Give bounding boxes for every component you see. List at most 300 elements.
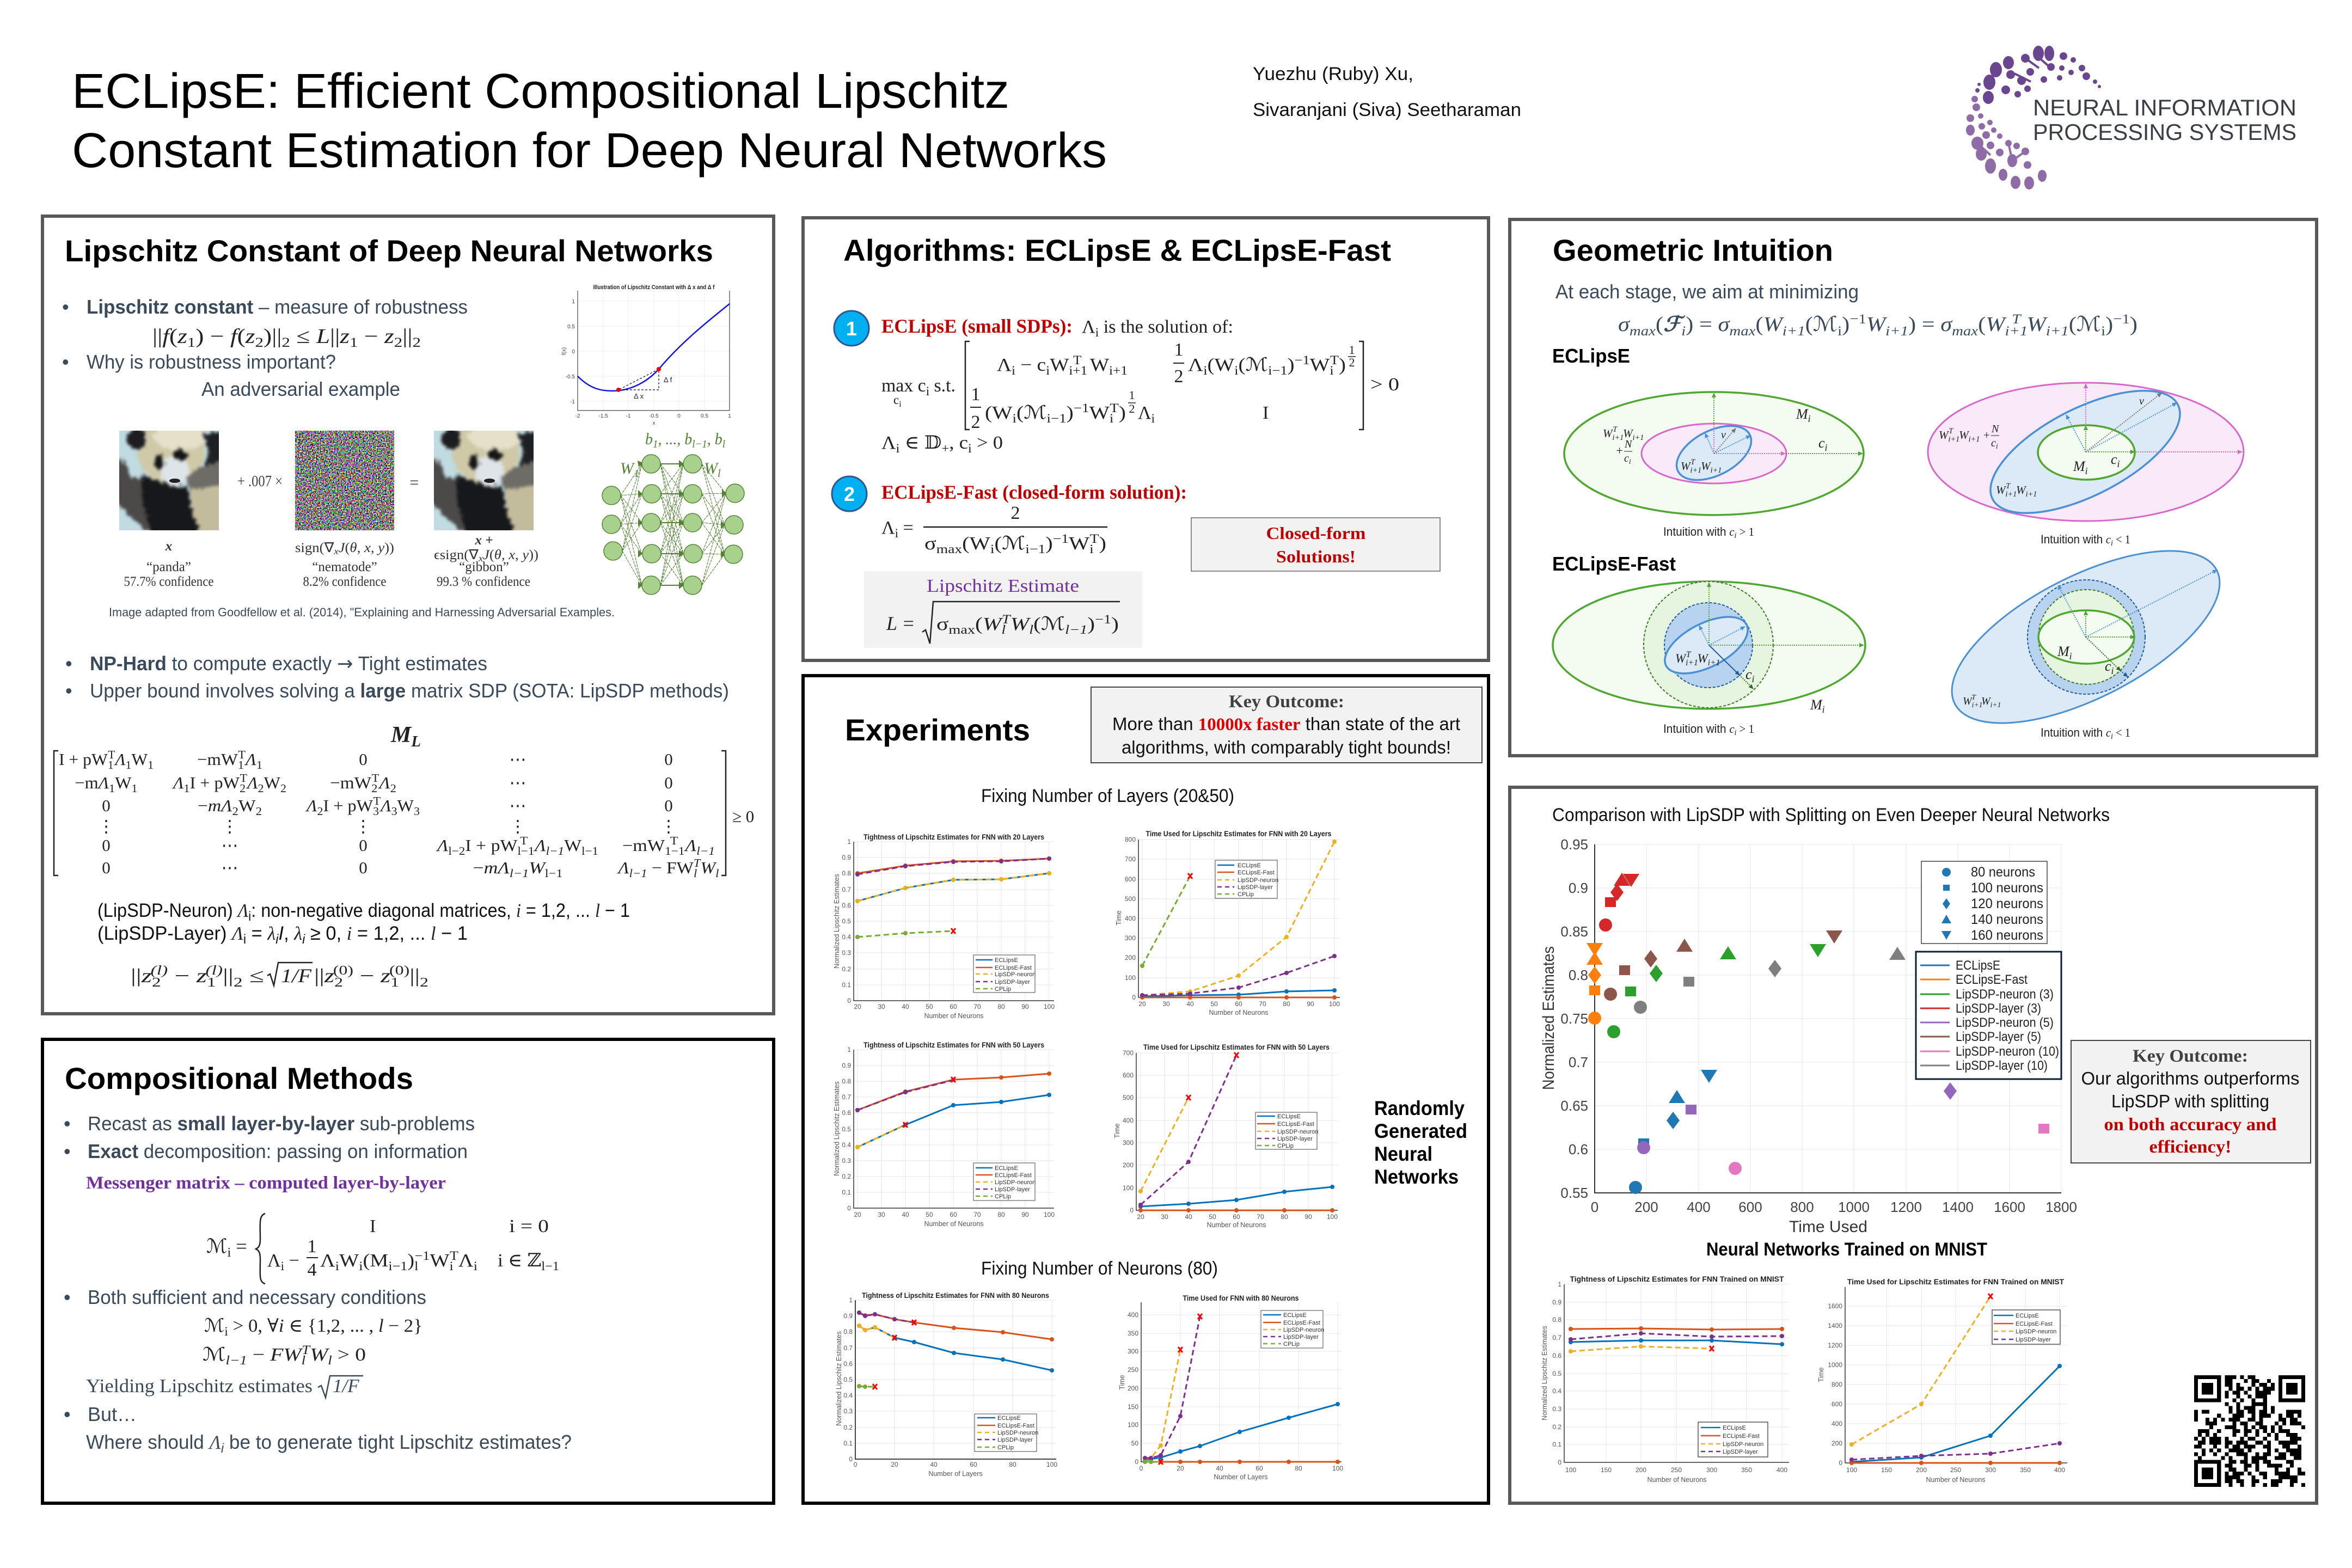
formula: closed-form	[881, 503, 1107, 556]
panel: compositional methods	[42, 1039, 774, 1503]
chart: tightness 20 layers: Number of Neurons	[924, 1012, 984, 1020]
formula: bound: −	[168, 965, 197, 987]
chart: time 50 layers: Number of Neurons	[1206, 1221, 1266, 1229]
chart: illustration of Lipschitz constant: 0.5	[701, 413, 708, 419]
chart: time 80 neurons: Time	[1118, 1375, 1126, 1390]
formula: small SDP: i+1	[1109, 364, 1128, 378]
formula: M_L matrix: −mW	[330, 773, 369, 792]
chart: illustration of Lipschitz constant: Illustration of Lipschitz Constant with Δ x and Δ f	[593, 284, 715, 291]
formula: closed-form: )	[1099, 534, 1106, 554]
chart: scatter comparison: Normalized Estimates	[1540, 946, 1558, 1090]
chart: time MNIST: 1000	[1828, 1361, 1842, 1369]
chart: time 20 layers	[1115, 829, 1340, 1016]
chart: time 80 neurons: 0	[1140, 1465, 1143, 1472]
formula: M_L matrix: T	[372, 771, 379, 785]
formula: M_L matrix: l−1	[510, 867, 529, 880]
subheading: ECLipsE-Fast: ECLipsE-Fast	[1552, 553, 1676, 575]
formula: sigma max: )	[1842, 313, 1849, 336]
diagram: ECLipsE-Fast c_i less than 1: c	[2105, 658, 2111, 674]
formula: bound: 2	[234, 975, 243, 990]
chart: time 50 layers: 50	[1209, 1213, 1216, 1221]
formula: bound: 1/F	[281, 965, 312, 987]
text: ECLipsE heading: ECLipsE (small SDPs):	[881, 315, 1073, 337]
callout: Lipschitz estimate: l−1	[1065, 623, 1087, 637]
bullet: why robustness	[62, 351, 400, 400]
formula: sigma max: W	[1763, 313, 1785, 336]
callout: closed-form solutions: Closed-form	[1266, 523, 1366, 543]
formula: M_L matrix: I + pW	[189, 773, 240, 792]
formula: M_L matrix: Λ	[533, 836, 546, 855]
text: LipSDP variants: i	[275, 932, 279, 947]
formula: conditions: −	[247, 1345, 270, 1365]
formula: M_L matrix: −mΛ	[75, 773, 108, 792]
formula: conditions: l−1	[226, 1353, 247, 1368]
formula: Lipschitz definition: )||	[264, 325, 281, 348]
formula: Lipschitz definition: z	[384, 325, 394, 348]
formula: messenger recursion: i−1	[388, 1259, 407, 1273]
heading: Experiments	[845, 713, 1030, 747]
formula: closed-form: T	[1090, 532, 1099, 546]
diagram: ECLipsE c_i greater than 1: T	[1690, 458, 1695, 467]
diagram: ECLipsE-Fast c_i less than 1: W	[1981, 695, 1992, 707]
legend: methods	[1916, 952, 2061, 1079]
formula: closed-form: (W	[962, 534, 991, 554]
formula: sigma max: (ℳ	[1805, 313, 1837, 336]
chart: tightness MNIST: Normalized Lipschitz Estimates	[1541, 1326, 1548, 1420]
chart: time 50 layers: 80	[1281, 1213, 1288, 1221]
formula: Lipschitz definition: ≤	[290, 325, 316, 348]
formula: small SDP: s.t.	[929, 376, 955, 396]
formula: sigma max: ) =	[1908, 313, 1940, 336]
diagram: ECLipsE c_i less than 1: i+1	[1948, 435, 1959, 444]
chart: tightness MNIST: Tightness of Lipschitz Estimates for FNN Trained on MNIST	[1570, 1275, 1784, 1283]
diagram: neural network	[602, 430, 744, 595]
callout: key outcome: Key Outcome:	[1229, 692, 1344, 712]
chart: tightness 50 layers: 60	[950, 1211, 957, 1218]
image: adversarial noise	[295, 431, 394, 530]
formula: M_L matrix: 1	[183, 782, 189, 795]
chart: time 80 neurons	[1118, 1294, 1343, 1481]
diagram: ECLipsE-Fast c_i greater than 1: i+1	[1708, 658, 1720, 667]
formula: M_L matrix: 0	[359, 750, 367, 769]
callout: Lipschitz estimate: l	[1029, 623, 1033, 637]
diagram: ECLipsE c_i less than 1: v	[2139, 395, 2144, 407]
chart: time 50 layers: 400	[1123, 1117, 1134, 1124]
caption: panda: “panda”	[146, 560, 191, 574]
formula: M_L matrix: M	[391, 722, 411, 748]
chart: time 20 layers: 800	[1125, 836, 1136, 843]
chart: tightness MNIST: LipSDP-layer	[1723, 1449, 1758, 1455]
formula: sigma max: max	[1952, 323, 1979, 339]
chart: illustration of Lipschitz constant: 0	[677, 413, 681, 419]
formula: small SDP: > 0	[1370, 375, 1399, 395]
callout: Lipschitz estimate: (	[975, 614, 983, 634]
chart: tightness 20 layers: LipSDP-layer	[995, 979, 1030, 985]
diagram: ECLipsE c_i less than 1: W	[1959, 428, 1970, 442]
subheading: ECLipsE: ECLipsE	[1552, 345, 1630, 367]
formula: small SDP: )	[1119, 403, 1126, 423]
formula: sigma max: i	[1681, 323, 1686, 339]
formula: M_L matrix: 2	[390, 782, 396, 795]
formula: small SDP: > 0	[972, 433, 1003, 453]
formula: messenger recursion: ℳ	[206, 1235, 228, 1257]
formula: M_L matrix: W	[700, 858, 718, 877]
callout: key outcome comparison	[2071, 1040, 2311, 1163]
diagram: ECLipsE-Fast c_i greater than 1: Intuition with c	[1663, 722, 1735, 736]
formula: bound: −	[353, 965, 381, 987]
text: LipSDP variants: (LipSDP-Layer) Λ	[97, 923, 243, 944]
text: image credit: Image adapted from Goodfellow et al. (2014), "Explaining and Harnessing Adversarial Examples.	[109, 605, 615, 619]
chart: tightness 20 layers: 0.4	[842, 933, 851, 941]
formula: small SDP: 1	[1174, 340, 1184, 360]
chart: time 50 layers: 600	[1123, 1071, 1134, 1079]
chart: tightness 50 layers: 70	[973, 1211, 981, 1218]
formula: M_L matrix: 2	[256, 805, 262, 818]
chart: illustration of Lipschitz constant: 0.5	[567, 324, 575, 330]
diagram: ECLipsE c_i greater than 1: v	[1721, 429, 1726, 441]
formula: small SDP: W	[1050, 355, 1069, 375]
chart: tightness 50 layers: 0.4	[842, 1141, 851, 1149]
formula: small SDP: T	[1110, 401, 1119, 415]
formula: sigma max: −1	[1849, 311, 1866, 327]
formula: M_L matrix: 2	[258, 782, 264, 795]
chart: tightness 20 layers: 80	[997, 1003, 1005, 1010]
chart: time MNIST: 400	[1832, 1420, 1842, 1428]
chart: time 20 layers: 100	[1125, 974, 1136, 982]
formula: bound: 2	[152, 975, 161, 990]
formula: sigma max: max	[1630, 323, 1656, 339]
chart: time 20 layers: 500	[1125, 895, 1136, 903]
callout: key outcome comparison: Key Outcome:	[2133, 1046, 2248, 1066]
callout: key outcome comparison: efficiency!	[2149, 1137, 2231, 1157]
chart: time 50 layers: ECLipsE-Fast	[1277, 1121, 1314, 1128]
formula: messenger recursion: 1	[307, 1236, 317, 1257]
chart: tightness MNIST: 0	[1558, 1459, 1561, 1466]
text: ECLipsE heading	[881, 315, 1233, 340]
formula: closed-form: Λ	[881, 518, 895, 538]
formula: M_L matrix: T	[373, 794, 381, 807]
diagram: ECLipsE c_i less than 1: T	[1949, 427, 1953, 436]
formula: Lipschitz definition: 1	[187, 334, 195, 350]
formula: conditions: T	[302, 1343, 311, 1357]
callout: Lipschitz estimate: )	[1087, 614, 1095, 634]
panel: experiments	[803, 676, 1489, 1503]
chart: scatter comparison: 1200	[1890, 1199, 1922, 1215]
chart: tightness 80 neurons: ECLipsE	[997, 1415, 1021, 1422]
formula: small SDP: 1	[1129, 388, 1135, 402]
title: ECLipsE: Efficient Compositional Lipschitz	[72, 64, 1009, 119]
formula: small SDP: W	[1310, 355, 1330, 375]
text: LipSDP variants: i	[243, 932, 246, 947]
chart: tightness 20 layers: 100	[1044, 1003, 1055, 1010]
chart: tightness MNIST: ECLipsE-Fast	[1723, 1433, 1760, 1440]
image: panda adversarial	[426, 416, 542, 538]
chart: tightness 50 layers: Number of Neurons	[924, 1220, 984, 1228]
formula: messenger recursion: 4	[307, 1260, 317, 1280]
formula: M_L matrix: Λ	[377, 773, 390, 792]
formula: closed-form: σ	[924, 534, 934, 554]
chart: scatter comparison: 800	[1790, 1199, 1814, 1215]
formula: M_L matrix: 0	[359, 836, 367, 855]
chart: tightness MNIST: 300	[1706, 1466, 1717, 1474]
formula: Lipschitz definition: L||z	[316, 325, 348, 348]
chart: scatter comparison: 0.75	[1560, 1010, 1588, 1027]
chart: tightness 50 layers: 0.7	[842, 1093, 851, 1101]
chart: tightness MNIST: 1	[1558, 1281, 1561, 1288]
chart: tightness MNIST: 400	[1777, 1466, 1787, 1474]
formula: M_L matrix: W	[264, 773, 281, 792]
formula: conditions: ℳ	[204, 1316, 224, 1336]
chart: time MNIST: Number of Neurons	[1926, 1476, 1986, 1484]
diagram: ECLipsE c_i greater than 1: W	[1701, 460, 1712, 473]
formula: small SDP: T	[1330, 353, 1339, 367]
bullet: why robustness: •	[62, 351, 69, 373]
chart: time 50 layers: 700	[1123, 1049, 1134, 1057]
chart: tightness 80 neurons: 40	[930, 1461, 938, 1468]
formula: sigma max: (	[1755, 313, 1763, 336]
diagram: ECLipsE c_i greater than 1: > 1	[1736, 525, 1754, 538]
chart: time 20 layers: 700	[1125, 855, 1136, 863]
formula: bound: (l)	[205, 963, 223, 978]
text: question: be to generate tight Lipschitz estimates?	[224, 1431, 572, 1453]
bullet: but: •	[64, 1403, 71, 1425]
diagram: ECLipsE-Fast c_i less than 1: M	[2057, 644, 2069, 659]
chart: time 50 layers: LipSDP-neuron	[1277, 1129, 1318, 1135]
chart: tightness 50 layers: 100	[1044, 1211, 1055, 1218]
chart: time MNIST	[1817, 1277, 2067, 1484]
chart: tightness 80 neurons: 20	[891, 1461, 898, 1468]
chart: time 50 layers: Time	[1113, 1123, 1121, 1138]
bullet: Lipschitz constant: Lipschitz constant – measure of robustness	[87, 296, 468, 318]
formula: conditions: i	[224, 1325, 228, 1339]
formula: small SDP: 2	[1129, 402, 1135, 415]
callout: Lipschitz estimate: σ	[936, 614, 946, 634]
formula: M_L matrix: Λ	[171, 773, 184, 792]
badge 2	[832, 476, 867, 511]
panel: geometric intuition	[1510, 219, 2317, 758]
chart: time 80 neurons: 40	[1216, 1465, 1223, 1472]
chart: time 80 neurons: 400	[1128, 1311, 1138, 1319]
diagram: ECLipsE-Fast c_i greater than 1: i+1	[1686, 658, 1698, 667]
formula: small SDP: i+1	[1069, 364, 1087, 378]
diagram: ECLipsE c_i less than 1: c	[1991, 437, 1996, 449]
formula: small SDP: 1	[971, 384, 980, 405]
chart: tightness MNIST: 150	[1601, 1466, 1612, 1474]
formula: Lipschitz definition: 1	[350, 334, 358, 350]
formula: small SDP: −1	[1074, 401, 1089, 415]
chart: time 20 layers: 20	[1138, 1000, 1146, 1008]
callout: key outcome: More than 10000x faster than state of the art	[1112, 714, 1460, 734]
formula: Lipschitz definition: 2	[255, 334, 264, 350]
diagram: ECLipsE c_i less than 1: +	[1980, 428, 1990, 442]
chart: time MNIST: 800	[1832, 1381, 1842, 1388]
text: randomly generated neural networks	[1374, 1097, 1467, 1188]
text: LipSDP variants	[97, 900, 630, 947]
formula: sigma max: i+1	[2046, 323, 2069, 339]
chart: tightness 20 layers: 60	[950, 1003, 957, 1010]
formula: M_L matrix: l−1	[545, 867, 563, 880]
caption: gibbon: “gibbon”	[459, 560, 509, 574]
panel: Lipschitz constant of deep neural networks	[42, 216, 774, 1014]
diagram: ECLipsE-Fast c_i less than 1: i	[2111, 665, 2114, 676]
formula: sigma max: −1	[2113, 311, 2130, 327]
panel: comparison and MNIST	[1510, 787, 2317, 1503]
chart: scatter comparison: 0.8	[1569, 967, 1588, 983]
formula: messenger recursion: i	[450, 1259, 454, 1273]
formula: small SDP: I	[1263, 403, 1269, 423]
callout: key outcome	[1091, 687, 1482, 763]
text: LipSDP variants: (LipSDP-Neuron) Λ	[97, 900, 249, 921]
chart: time 20 layers: 80	[1283, 1000, 1290, 1008]
formula: M_L matrix: W	[131, 750, 148, 769]
formula: M_L matrix: Λ	[246, 773, 258, 792]
formula: small SDP: +	[941, 442, 949, 456]
callout: key outcome comparison: Our algorithms outperforms	[2081, 1068, 2300, 1088]
diagram: neural network: l	[722, 438, 725, 450]
formula: M_L matrix: 0	[359, 858, 367, 877]
chart: time 20 layers: 200	[1125, 954, 1136, 961]
chart: tightness 80 neurons: Number of Layers	[928, 1470, 983, 1478]
bullet: sufficient and necessary: Both sufficient and necessary conditions	[88, 1286, 426, 1308]
chart: illustration of Lipschitz constant: x	[652, 420, 656, 426]
chart: tightness 50 layers: 80	[997, 1211, 1005, 1218]
formula: M_L matrix: ⋮	[510, 817, 526, 836]
chart: time 80 neurons: LipSDP-layer	[1283, 1334, 1319, 1340]
heading: Algorithms: ECLipsE & ECLipsE-Fast	[843, 233, 1391, 267]
chart: scatter comparison: 0.95	[1560, 836, 1588, 853]
legend: neuron counts	[1921, 861, 2047, 944]
chart: tightness 80 neurons: 0	[854, 1461, 857, 1468]
caption: nematode	[295, 541, 394, 589]
legend: neuron counts: 120 neurons	[1971, 896, 2043, 911]
formula: bound: (0)	[333, 963, 353, 978]
formula: Lipschitz definition: ||f(z	[152, 325, 186, 348]
callout: Lipschitz estimate: W	[1010, 614, 1031, 634]
subheading: fixing layers: Fixing Number of Layers (20&50)	[981, 786, 1234, 806]
heading: MNIST: Neural Networks Trained on MNIST	[1706, 1239, 1987, 1260]
chart: tightness 20 layers: 1	[847, 838, 851, 846]
formula: small SDP: )	[1288, 355, 1295, 375]
chart: time MNIST: ECLipsE	[2016, 1313, 2039, 1319]
chart: time MNIST: Time Used for Lipschitz Estimates for FNN Trained on MNIST	[1847, 1277, 2064, 1286]
chart: time 80 neurons: 200	[1128, 1385, 1138, 1392]
formula: M_L matrix: T	[238, 748, 246, 761]
callout: Lipschitz estimate: )	[1111, 614, 1119, 634]
chart: illustration of Lipschitz constant: 1	[728, 413, 731, 419]
caption: nematode: 8.2% confidence	[303, 574, 387, 589]
diagram: ECLipsE c_i greater than 1: T	[1613, 425, 1618, 434]
diagram: ECLipsE-Fast c_i less than 1: i+1	[1972, 701, 1982, 709]
chart: tightness MNIST: 250	[1671, 1466, 1682, 1474]
chart: time MNIST: 1400	[1828, 1322, 1842, 1330]
formula: M_L matrix: 0	[664, 796, 673, 815]
formula: sigma max: i+1	[2005, 323, 2028, 339]
formula: small SDP: Λ	[997, 355, 1010, 375]
chart: tightness 20 layers: 20	[854, 1003, 861, 1010]
formula: closed-form: (ℳ	[995, 534, 1025, 554]
bullet: sufficient and necessary: •	[64, 1286, 71, 1308]
formula: M_L matrix: T	[694, 856, 701, 869]
formula: M_L matrix: T	[108, 748, 115, 761]
chart: time MNIST: 150	[1881, 1466, 1892, 1474]
legend: methods: ECLipsE	[1956, 958, 2000, 973]
formula: M_L matrix: 0	[102, 836, 111, 855]
text: question: i	[221, 1441, 224, 1456]
diagram: ECLipsE c_i less than 1: N	[1991, 423, 2000, 435]
diagram: ECLipsE c_i greater than 1: Intuition with c	[1663, 525, 1735, 538]
chart: tightness 80 neurons: 0.2	[843, 1424, 853, 1431]
formula: small SDP: i	[1110, 412, 1113, 426]
diagram: ECLipsE-Fast c_i greater than 1: c	[1745, 666, 1752, 682]
text: LipSDP variants: I	[279, 923, 284, 944]
text: yielding estimates: Yielding Lipschitz estimates	[86, 1375, 313, 1396]
chart: time MNIST: 200	[1916, 1466, 1927, 1474]
formula: bound: ||z	[131, 965, 149, 987]
diagram: neural network: 1	[634, 468, 639, 480]
text: messenger matrix: Messenger matrix – computed layer-by-layer	[86, 1173, 446, 1193]
chart: scatter comparison	[1540, 836, 2077, 1236]
formula: small SDP: (W	[985, 403, 1008, 423]
bullet: but: But…	[88, 1403, 137, 1425]
diagram: ECLipsE-Fast c_i less than 1: T	[1971, 693, 1976, 701]
chart: time MNIST: 600	[1832, 1400, 1842, 1408]
caption: gibbon	[434, 533, 538, 589]
formula: bound	[131, 963, 428, 990]
formula: M_L matrix: L	[411, 733, 421, 750]
formula: M_L matrix: 1	[148, 758, 154, 771]
formula: Lipschitz definition: ||	[402, 325, 413, 348]
subheading: fixing neurons: Fixing Number of Neurons (80)	[981, 1258, 1218, 1279]
formula: small SDP: i	[1152, 412, 1155, 426]
text: ECLipsE heading: is the solution of:	[1099, 317, 1233, 337]
formula: small SDP: T	[1073, 353, 1082, 367]
diagram: neural network: l	[718, 468, 721, 480]
caption: nematode: “nematode”	[312, 560, 377, 574]
chart: scatter comparison: 0.7	[1569, 1054, 1588, 1070]
chart: time 80 neurons: 60	[1255, 1465, 1263, 1472]
text: randomly generated neural networks: Networks	[1374, 1166, 1459, 1188]
chart: tightness 80 neurons: ECLipsE-Fast	[997, 1423, 1034, 1429]
text: ECLipsE-Fast heading: ECLipsE-Fast (closed-form solution):	[881, 481, 1187, 503]
diagram: ECLipsE c_i less than 1: W	[1939, 428, 1948, 442]
chart: tightness 50 layers: 0.5	[842, 1125, 851, 1133]
formula: conditions	[203, 1316, 422, 1368]
formula: M_L matrix: ⋯	[510, 796, 526, 815]
chart: time 20 layers: Time Used for Lipschitz Estimates for FNN with 20 Layers	[1146, 829, 1332, 838]
chart: tightness 20 layers: 50	[926, 1003, 933, 1010]
formula: sigma max: max	[1729, 323, 1756, 339]
formula: M_L matrix	[54, 722, 754, 880]
chart: time 50 layers: 40	[1185, 1213, 1192, 1221]
chart: time 50 layers: 0	[1130, 1206, 1134, 1214]
formula: sigma max: i	[2101, 323, 2105, 339]
formula: small SDP: −1	[1295, 353, 1310, 367]
chart: scatter comparison: 0.65	[1560, 1098, 1588, 1114]
formula: M_L matrix: ⋯	[221, 858, 238, 877]
chart: tightness 80 neurons: LipSDP-layer	[997, 1437, 1033, 1443]
bullet: exact: Exact decomposition: passing on information	[88, 1140, 468, 1162]
formula: messenger recursion: W	[339, 1251, 359, 1271]
formula: small SDP: (ℳ	[1239, 355, 1268, 375]
diagram: ECLipsE c_i less than 1: T	[2006, 482, 2011, 491]
text: +.007 x: + .007 ×	[237, 473, 283, 490]
chart: tightness 20 layers: 0.7	[842, 886, 851, 893]
diagram: neural network: W	[704, 460, 718, 477]
text: equals: =	[410, 474, 419, 492]
bullet: recast: •	[64, 1112, 71, 1135]
chart: tightness 50 layers: 0	[847, 1204, 851, 1212]
formula: small SDP: , c	[949, 433, 968, 453]
